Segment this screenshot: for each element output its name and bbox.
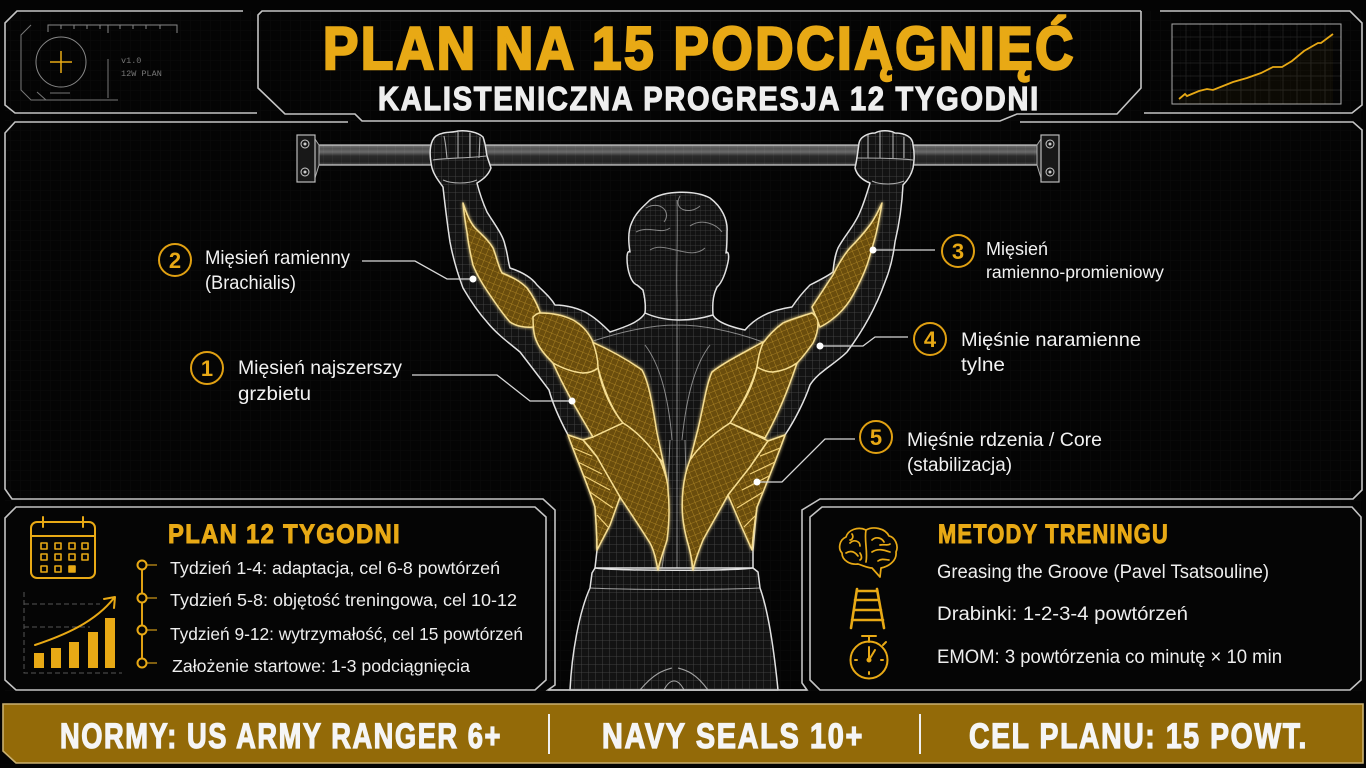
callout 4: rear deltoids: tylne	[961, 354, 1005, 376]
muscle: left upper lat	[553, 363, 623, 437]
muscle: left latissimus	[583, 423, 669, 570]
callout 5: core: Mięśnie rdzenia / Core	[907, 429, 1102, 451]
panel: top-right progress chart	[1144, 11, 1362, 113]
icon: stopwatch	[850, 636, 888, 678]
muscle: left rear deltoid	[533, 313, 598, 373]
callout 5: core: 5	[870, 425, 882, 450]
banner: norms: NORMY: US ARMY RANGER 6+	[60, 717, 502, 756]
methods list	[937, 562, 1282, 668]
head	[627, 192, 729, 320]
callout 5: core: (stabilizacja)	[907, 454, 1012, 476]
title: PLAN NA 15 PODCIĄGNIĘĆ	[323, 15, 1076, 82]
plan list: Założenie startowe: 1-3 podciągnięcia	[172, 656, 470, 676]
banner: norms	[3, 704, 1363, 763]
pull-up bar	[297, 135, 1059, 182]
callout 2: brachialis: (Brachialis)	[205, 272, 296, 294]
icon: ladder	[851, 589, 884, 628]
heading: plan: PLAN 12 TYGODNI	[168, 519, 401, 549]
callout 1: latissimus: Mięsień najszerszy	[238, 357, 402, 379]
callout 2: brachialis: Mięsień ramienny	[205, 247, 350, 269]
plan list: Tydzień 5-8: objętość treningowa, cel 10-12	[170, 590, 517, 610]
plan list: Tydzień 1-4: adaptacja, cel 6-8 powtórzeń	[170, 558, 500, 578]
muscle: right rear deltoid	[757, 313, 818, 372]
muscle: right latissimus	[682, 423, 768, 570]
methods list: Greasing the Groove (Pavel Tsatsouline)	[937, 562, 1269, 583]
callout 1: latissimus	[191, 352, 576, 405]
panel: top-left HUD: 12W PLAN	[121, 69, 162, 79]
callout 5: core	[754, 421, 1102, 486]
subtitle: KALISTENICZNA PROGRESJA 12 TYGODNI	[378, 80, 1040, 117]
figure: wireframe back with highlighted muscles	[430, 131, 914, 690]
callout 3: brachioradialis	[870, 235, 1164, 282]
muscle: right teres	[685, 342, 763, 480]
callout 2: brachialis	[159, 244, 476, 294]
muscle: left brachialis	[463, 203, 540, 327]
muscle: right upper lat	[730, 363, 797, 438]
callout 1: latissimus: grzbietu	[238, 383, 311, 405]
muscle: left core obliques	[568, 435, 620, 550]
icon: rising bar chart	[24, 592, 122, 673]
panel: main anatomy frame	[5, 122, 1362, 690]
icon: brain	[840, 528, 897, 577]
heading: methods: METODY TRENINGU	[938, 519, 1169, 549]
panel: top-left HUD: v1.0	[121, 56, 141, 66]
spine and back contours	[590, 300, 763, 568]
muscle: right brachioradialis	[812, 203, 882, 327]
hair strands	[636, 196, 722, 300]
muscle: left teres	[592, 342, 667, 480]
body silhouette	[430, 131, 914, 568]
callout 4: rear deltoids	[816, 323, 1141, 376]
muscle: right core obliques	[728, 435, 785, 550]
plan list: Tydzień 9-12: wytrzymałość, cel 15 powtórzeń	[170, 624, 523, 644]
timeline	[138, 560, 157, 668]
callout 1: latissimus: 1	[201, 356, 213, 381]
panel: training methods	[810, 507, 1361, 690]
icon: calendar	[31, 517, 95, 578]
hand and wrist detail lines	[433, 132, 913, 184]
panel: top-left HUD	[5, 11, 257, 113]
callout 3: brachioradialis: Mięsień	[986, 239, 1048, 259]
methods list: EMOM: 3 powtórzenia co minutę × 10 min	[937, 647, 1282, 668]
callout 4: rear deltoids: 4	[924, 327, 937, 352]
callout 3: brachioradialis: ramienno-promieniowy	[986, 262, 1164, 282]
panel: title	[258, 11, 1141, 121]
callout 4: rear deltoids: Mięśnie naramienne	[961, 329, 1141, 351]
plan list	[170, 558, 523, 676]
callout 2: brachialis: 2	[169, 248, 181, 273]
methods list: Drabinki: 1-2-3-4 powtórzeń	[937, 604, 1188, 625]
banner: norms: NAVY SEALS 10+	[602, 717, 864, 756]
callout 3: brachioradialis: 3	[952, 239, 964, 264]
panel: 12-week plan	[5, 507, 546, 690]
shorts	[570, 568, 778, 690]
